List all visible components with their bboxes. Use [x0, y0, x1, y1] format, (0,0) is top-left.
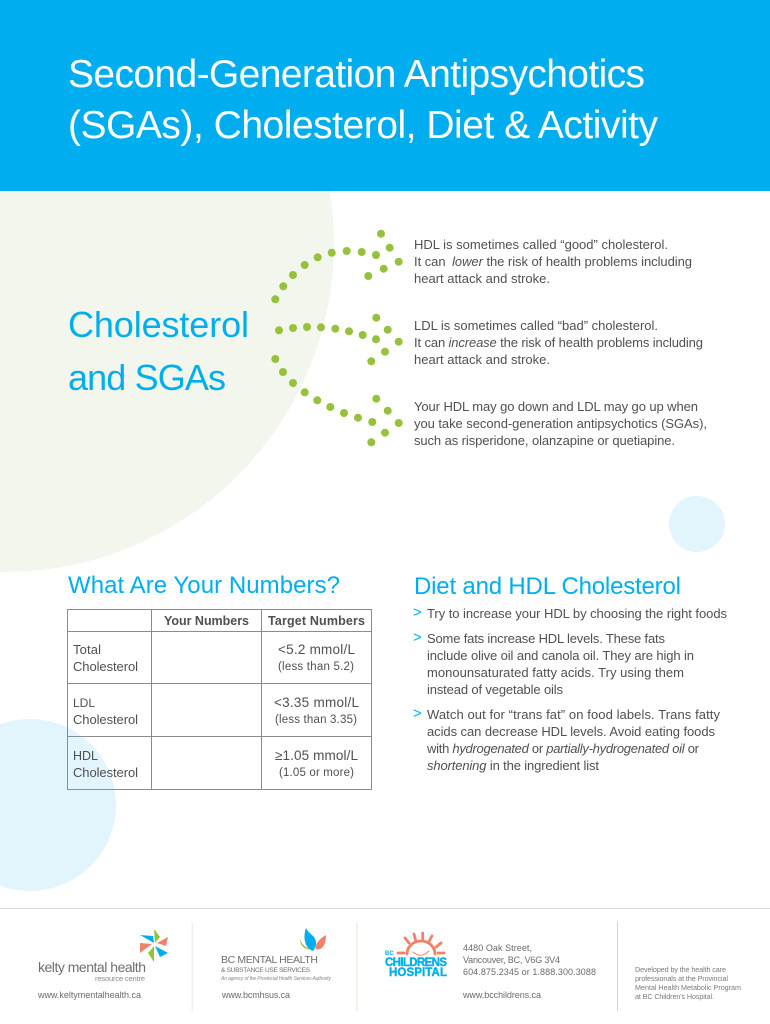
background circle: lower-left pale blue: [0, 719, 116, 891]
heading: Cholesterol and SGAs: and SGAs: [68, 357, 226, 398]
title: [68, 53, 658, 147]
text block: LDL: It can increase the risk of health problems including: [414, 335, 703, 350]
credit text: Mental Health Metabolic Program: [635, 983, 741, 992]
dotted arrow: SGAs: [271, 355, 403, 446]
heading: Diet and HDL Cholesterol: Diet and HDL Cholesterol: [414, 573, 681, 600]
background circle: small pale blue: [669, 496, 725, 552]
row: total cholesterol: [73, 642, 355, 674]
text block: HDL: HDL is sometimes called “good” cholesterol.: [414, 237, 668, 252]
logo: BC Mental Health: BC MENTAL HEALTH: [221, 954, 318, 966]
table: your numbers: [68, 610, 372, 790]
icon: pinwheel: [140, 929, 168, 962]
logo: BC Mental Health: [220, 928, 332, 1000]
heading: What Are Your Numbers?: What Are Your Numbers?: [68, 572, 340, 599]
logo: Kelty Mental Health: resource centre: [95, 974, 145, 983]
row: HDL cholesterol: (1.05 or more): [279, 767, 354, 779]
logo: BC Mental Health: www.bcmhsus.ca: [221, 990, 290, 1000]
bullet 2: include olive oil and canola oil. They are high in: [427, 648, 694, 663]
text block: SGAs: you take second-generation antipsychotics (SGAs),: [414, 416, 707, 431]
logo: BC Children's Hospital: CHILDRENS: [385, 957, 447, 969]
dotted arrow: HDL: [271, 230, 403, 303]
text block: LDL: heart attack and stroke.: [414, 352, 550, 367]
credit text: professionals at the Provincial: [635, 974, 728, 983]
bullet 2: monounsaturated fatty acids. Try using them: [427, 665, 684, 680]
credit text: [635, 965, 741, 1001]
address: www.bcchildrens.ca: [462, 990, 541, 1000]
credit text: at BC Children's Hospital.: [635, 992, 714, 1001]
logo: BC Children's Hospital: [385, 933, 447, 979]
text block: LDL: LDL is sometimes called “bad” cholesterol.: [414, 318, 658, 333]
row: HDL cholesterol: ≥1.05 mmol/L: [275, 748, 358, 763]
bullet 2: Some fats increase HDL levels. These fats: [427, 631, 666, 646]
dotted arrow: LDL: [275, 314, 403, 365]
bullet 2: [413, 629, 694, 697]
title: (SGAs), Cholesterol, Diet & Activity: [68, 104, 658, 147]
text block: SGAs: [414, 399, 707, 448]
text block: HDL: [414, 237, 692, 286]
logo: BC Mental Health: & SUBSTANCE USE SERVICES: [221, 967, 311, 974]
logo: Kelty Mental Health: www.keltymentalhealth.ca: [37, 990, 141, 1000]
bullet 1: Try to increase your HDL by choosing the right foods: [427, 606, 728, 621]
logo: Kelty Mental Health: kelty mental health: [38, 959, 146, 975]
bullet 3: acids can decrease HDL levels. Avoid eating foods: [427, 724, 716, 739]
list: diet and HDL: [413, 604, 728, 773]
bullet 2: >: [413, 629, 422, 646]
logo: BC Mental Health: An agency of the Provincial Health Services Authority: [220, 976, 332, 982]
row: LDL cholesterol: [73, 695, 359, 727]
bullet 3: Watch out for “trans fat” on food labels. Trans fatty: [427, 707, 720, 722]
bullet 3: with hydrogenated or partially-hydrogenated oil or: [426, 741, 700, 756]
footer: [0, 908, 770, 1011]
row: LDL cholesterol: <3.35 mmol/L: [274, 695, 359, 710]
bullet 3: >: [413, 705, 422, 722]
address: Vancouver, BC, V6G 3V4: [463, 955, 560, 965]
row: HDL cholesterol: Cholesterol: [73, 765, 138, 780]
heading: Cholesterol and SGAs: Cholesterol: [68, 304, 249, 345]
row: total cholesterol: Total: [73, 642, 101, 657]
dotted branching arrows: [271, 230, 403, 446]
bullet 1: >: [413, 604, 422, 621]
row: LDL cholesterol: (less than 3.35): [275, 714, 357, 726]
text block: LDL: [414, 318, 703, 367]
address: 4480 Oak Street,: [463, 943, 532, 953]
text block: HDL: It can lower the risk of health problems including: [414, 254, 692, 269]
background circle: pale green: [0, 0, 334, 572]
bullet 3: [413, 705, 720, 773]
heading: Cholesterol and SGAs: [68, 304, 249, 398]
row: LDL cholesterol: LDL: [73, 696, 95, 710]
credit text: Developed by the health care: [635, 965, 726, 974]
bullet 2: instead of vegetable oils: [427, 682, 564, 697]
row: LDL cholesterol: Cholesterol: [73, 712, 138, 727]
table header: [164, 614, 365, 628]
row: total cholesterol: <5.2 mmol/L: [278, 642, 355, 657]
row: total cholesterol: (less than 5.2): [278, 661, 354, 673]
icon: leaves: [300, 928, 326, 951]
logo: Kelty Mental Health: [37, 929, 168, 1000]
bullet 3: shortening in the ingredient list: [427, 758, 599, 773]
text block: SGAs: such as risperidone, olanzapine or quetiapine.: [414, 433, 675, 448]
table header: Your Numbers: [164, 614, 249, 628]
text block: SGAs: Your HDL may go down and LDL may go up when: [414, 399, 698, 414]
header banner: [0, 0, 770, 191]
table header: Target Numbers: [268, 614, 365, 628]
icon: sun: [398, 933, 444, 955]
logo: BC Children's Hospital: BC: [385, 951, 394, 957]
address: [462, 943, 596, 1000]
text block: HDL: heart attack and stroke.: [414, 271, 550, 286]
address: 604.875.2345 or 1.888.300.3088: [463, 967, 596, 977]
logo: BC Children's Hospital: HOSPITAL: [389, 967, 447, 979]
row: total cholesterol: Cholesterol: [73, 659, 138, 674]
row: HDL cholesterol: HDL: [73, 749, 98, 763]
title: Second-Generation Antipsychotics: [68, 53, 645, 96]
row: HDL cholesterol: [73, 748, 358, 780]
